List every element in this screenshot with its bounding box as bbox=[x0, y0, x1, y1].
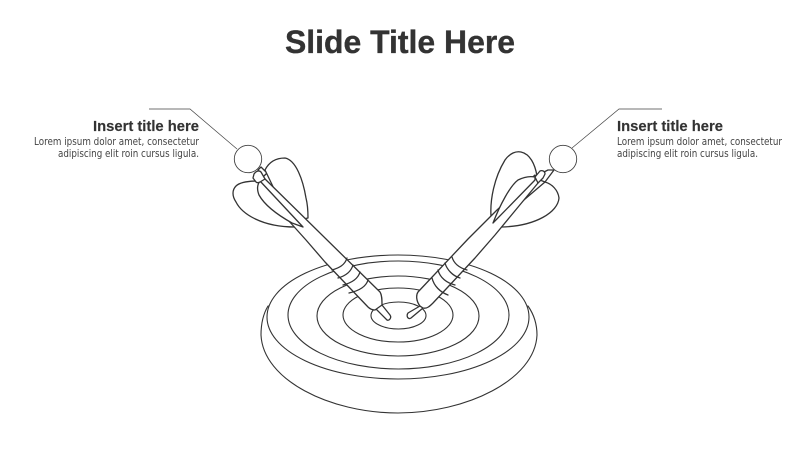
title: Slide Title Here bbox=[285, 24, 515, 60]
right marker circle bbox=[549, 145, 577, 173]
left callout text bbox=[34, 136, 200, 160]
right dart shaft and barrel bbox=[417, 175, 538, 308]
right callout bbox=[549, 109, 783, 173]
left dart cap bbox=[253, 171, 265, 183]
left dart needle bbox=[375, 305, 391, 320]
right dart feathers bbox=[491, 152, 559, 227]
left dart centre flight bbox=[258, 181, 303, 227]
left dart barrel grooves bbox=[332, 258, 368, 293]
right dart bbox=[407, 152, 559, 319]
dartboard bbox=[261, 255, 537, 413]
left dart bbox=[233, 158, 391, 320]
left callout heading: Insert title here bbox=[93, 119, 199, 135]
left callout text: adipiscing elit roin cursus ligula. bbox=[58, 148, 199, 160]
left dart shaft and barrel bbox=[259, 177, 382, 310]
right dart centre flight bbox=[493, 177, 535, 223]
right callout heading: Insert title here bbox=[617, 119, 723, 135]
left callout text: Lorem ipsum dolor amet, consectetur bbox=[34, 136, 200, 148]
right dart connector bbox=[540, 170, 554, 182]
right dart needle bbox=[407, 306, 423, 319]
right callout text: adipiscing elit roin cursus ligula. bbox=[617, 148, 758, 160]
right dart cap bbox=[535, 171, 545, 183]
left callout bbox=[34, 109, 262, 173]
right dart barrel grooves bbox=[432, 257, 467, 295]
left marker circle bbox=[234, 145, 262, 173]
right leader line bbox=[572, 109, 662, 148]
right callout text bbox=[617, 136, 783, 160]
left dart connector bbox=[258, 167, 267, 177]
left dart feathers bbox=[233, 158, 308, 227]
left leader line bbox=[149, 109, 237, 149]
